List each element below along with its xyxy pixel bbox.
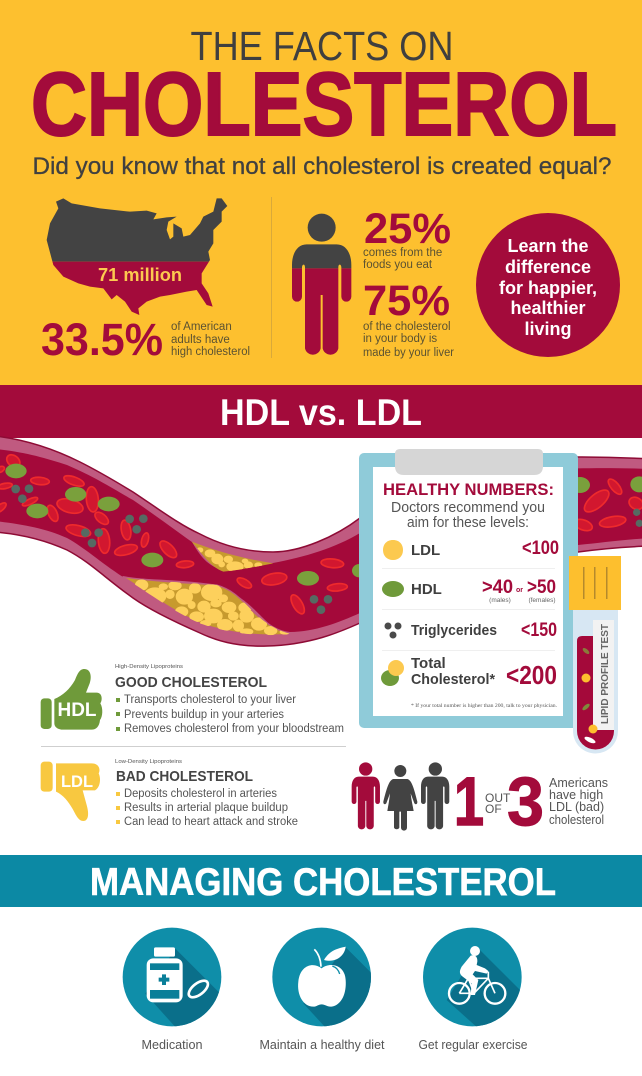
artery illustration: [0, 436, 642, 646]
stat text: liver: made by your liver: [363, 347, 454, 359]
icon: lipid profile test tube: [569, 556, 621, 754]
icon: medication: [123, 928, 222, 1027]
row: LDL: LDL: [411, 542, 440, 559]
label: exercise: Get regular exercise: [418, 1038, 528, 1052]
stat: 25%: 25%: [364, 205, 451, 253]
label: medication: Medication: [142, 1038, 203, 1052]
icon: US map: [47, 198, 227, 315]
heading band: HDL vs LDL: [0, 385, 642, 438]
title: the facts on: THE FACTS ON: [190, 23, 454, 69]
list: LDL risks: Can lead to heart attack and stroke: [124, 816, 298, 828]
callout: learn the difference: healthier: [510, 298, 586, 318]
text: out of: [485, 791, 511, 816]
row: triglycerides: <150: [521, 620, 557, 641]
icon: LDL thumb down: [41, 762, 100, 821]
plaque: lower deposit: [123, 577, 292, 635]
icon: LDL thumb down: LDL: [61, 772, 93, 791]
callout: learn the difference: for happier,: [499, 278, 597, 298]
list: LDL risks: Results in arterial plaque buildup: [124, 802, 288, 814]
text: recommendation: Doctors recommend you: [391, 499, 545, 516]
stat text: American adults: adults have: [171, 334, 230, 346]
text: out of: OUT: [485, 791, 511, 805]
stat text: foods: [363, 247, 442, 271]
list: LDL risks: [116, 788, 298, 828]
icon: cyclist: [423, 928, 522, 1027]
stat: 75%: 75%: [363, 277, 450, 325]
stat text: American adults: [171, 321, 250, 358]
stat: 33.5%: 33.5%: [41, 314, 163, 365]
row: HDL: HDL: [411, 581, 442, 598]
triglyceride particles: [11, 484, 332, 614]
icon: apple: [272, 928, 372, 1027]
list: LDL risks: Deposits cholesterol in arteries: [124, 788, 277, 800]
row: total cholesterol: Cholesterol*: [411, 671, 495, 688]
subtitle: Did you know that not all cholesterol is created equal?: [32, 153, 612, 180]
row: HDL: (females): [528, 597, 556, 604]
heading: good cholesterol: GOOD CHOLESTEROL: [115, 674, 267, 691]
panel: healthy numbers clipboard: [359, 449, 578, 728]
stat: 1 out of 3 Americans: [352, 762, 608, 840]
text: Americans have high LDL: LDL (bad): [549, 800, 604, 814]
icon: lipid profile test tube: LIPID PROFILE TEST: [599, 623, 611, 724]
icon: HDL thumb up: [41, 669, 102, 730]
heading band: managing cholesterol: MANAGING CHOLESTEROL: [90, 861, 556, 904]
text: out of: OF: [485, 802, 502, 816]
plaque: upper deposit: [192, 542, 273, 572]
row: triglycerides: Triglycerides: [411, 622, 497, 639]
red blood cells: [0, 452, 348, 616]
stat text: liver: in your body is: [363, 333, 437, 345]
icon: three people: [352, 762, 449, 831]
callout: learn the difference: Learn the: [507, 236, 589, 256]
list: HDL benefits: Removes cholesterol from your bloodstream: [124, 723, 344, 735]
cells right of clipboard: [570, 476, 642, 533]
text: Americans have high LDL: Americans: [549, 776, 608, 790]
footnote: * If your total number is higher than 200, talk to your physician.: [411, 702, 558, 709]
stat text: foods: comes from the: [363, 247, 442, 259]
panel: good cholesterol: [41, 664, 344, 735]
row: LDL: <100: [522, 538, 559, 559]
row: HDL: [382, 577, 556, 604]
panel: bad cholesterol: [41, 759, 298, 828]
text: Americans have high LDL: cholesterol: [549, 813, 604, 827]
callout: learn the difference: living: [524, 319, 572, 339]
text: Americans have high LDL: have high: [549, 788, 603, 802]
clipboard clip: [395, 449, 543, 475]
list: HDL benefits: [116, 694, 344, 735]
row: LDL: [383, 538, 559, 560]
text: recommendation: aim for these levels:: [407, 514, 529, 531]
icon: HDL thumb up: HDL: [58, 700, 97, 721]
row: triglycerides: [384, 620, 557, 641]
list: HDL benefits: Prevents buildup in your arteries: [124, 709, 284, 721]
row: total cholesterol: Total: [411, 655, 446, 672]
label: high-density lipoproteins: High-Density Lipoproteins: [115, 664, 183, 670]
callout: learn the difference: [476, 213, 620, 357]
row: HDL: (males): [489, 597, 511, 604]
heading band: managing cholesterol: [0, 855, 642, 907]
row: HDL: >40: [482, 577, 513, 598]
heading band: HDL vs LDL: HDL vs. LDL: [220, 392, 422, 433]
text: recommendation: [391, 499, 545, 531]
label: healthy diet: Maintain a healthy diet: [260, 1038, 385, 1052]
map label: 71 million: [98, 265, 182, 285]
row: total cholesterol: <200: [506, 660, 557, 690]
label: low-density lipoproteins: Low-Density Lipoproteins: [115, 759, 182, 765]
heading: healthy numbers: HEALTHY NUMBERS:: [383, 480, 554, 499]
icon: person: [292, 214, 351, 355]
row: HDL: or: [516, 587, 523, 594]
panel: yellow header: [0, 0, 642, 385]
heading: bad cholesterol: BAD CHOLESTEROL: [116, 768, 253, 785]
stat text: foods: foods you eat: [363, 259, 433, 271]
stat text: American adults: of American: [171, 321, 232, 333]
row: total cholesterol: [381, 655, 557, 690]
number: 1: 1: [454, 763, 484, 840]
row: HDL: >50: [527, 577, 556, 598]
number: 3: 3: [507, 763, 544, 840]
stat text: liver: of the cholesterol: [363, 321, 451, 333]
stat text: American adults: high cholesterol: [171, 346, 250, 358]
callout: learn the difference: difference: [505, 257, 591, 277]
list: HDL benefits: Transports cholesterol to your liver: [124, 694, 296, 706]
stat text: liver: [363, 321, 454, 359]
HDL particles: [5, 464, 367, 586]
text: Americans have high LDL: [549, 776, 608, 827]
